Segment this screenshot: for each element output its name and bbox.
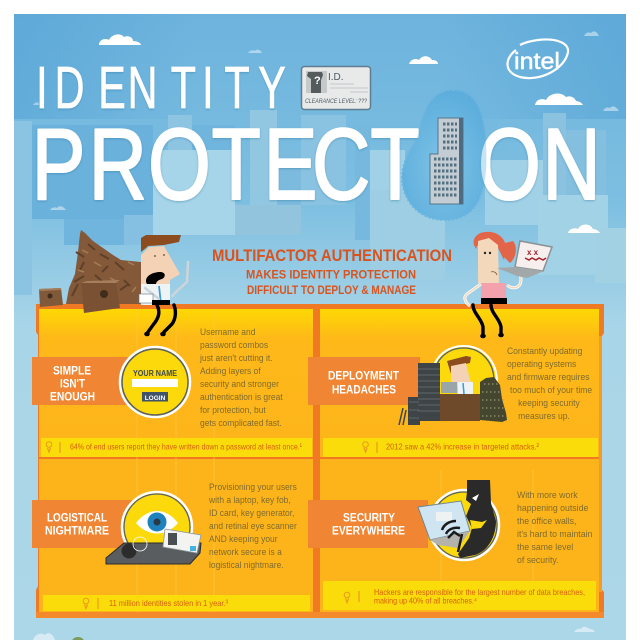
icon: login form: YOUR NAME — [133, 369, 178, 378]
body text: measures up. — [518, 411, 570, 421]
intel logo — [507, 40, 568, 78]
body text: just aren't cutting it. — [199, 353, 273, 363]
title: protection: ON — [478, 108, 601, 221]
icon: office building — [430, 118, 463, 204]
stat bar: 64% of end users report they have written down a password at least once.¹ — [70, 442, 302, 452]
body text: Provisioning your users — [209, 482, 297, 492]
icon: login form — [120, 347, 190, 417]
man character — [139, 235, 188, 336]
section: simple isn't enough — [32, 327, 312, 457]
body text: for protection, but — [200, 405, 266, 415]
shield bubble — [402, 90, 486, 220]
body text: operating systems — [507, 359, 577, 369]
tab: ISN'T — [60, 378, 85, 390]
body text: happening outside — [517, 503, 588, 513]
ID card icon: I.D. — [328, 72, 344, 83]
body text: logistical nightmare. — [209, 560, 284, 570]
body text: AND keeping your — [209, 534, 278, 544]
body text: with a laptop, key fob, — [208, 495, 291, 505]
section: security everywhere — [308, 480, 596, 610]
body text: Username and — [200, 327, 255, 337]
heading: multifactor authentication: DIFFICULT TO DEPLOY & MANAGE — [247, 283, 416, 297]
tab: NIGHTMARE — [45, 526, 109, 538]
body text: authentication is great — [200, 392, 283, 402]
body text: the same level — [517, 542, 573, 552]
icon: man behind desk — [399, 346, 507, 425]
tab: LOGISTICAL — [47, 512, 107, 524]
ID card icon — [302, 66, 370, 110]
stat bar — [323, 438, 598, 457]
section: deployment headaches — [308, 346, 598, 457]
pile of boxes — [39, 230, 141, 313]
stat bar: 2012 saw a 42% increase in targeted attacks.² — [386, 442, 539, 452]
tab — [32, 500, 132, 548]
stat bar: making up 40% of all breaches.⁴ — [374, 596, 477, 606]
body text: too much of your time — [510, 385, 592, 395]
bottom globe icon — [71, 637, 85, 640]
heading: multifactor authentication — [212, 246, 452, 297]
tab — [32, 357, 132, 405]
main panel — [36, 304, 604, 618]
stat bar — [323, 581, 596, 610]
body text: and firmware requires — [507, 372, 590, 382]
body text: network secure is a — [209, 547, 282, 557]
woman character: x x — [527, 248, 539, 257]
heading: multifactor authentication: MAKES IDENTITY PROTECTION — [246, 268, 416, 282]
title: protection: PROTECT — [32, 108, 420, 221]
body text: gets complicated fast. — [200, 418, 282, 428]
bubble overlay on letters — [402, 90, 486, 220]
body text: of security. — [517, 555, 559, 565]
intel logo: intel — [514, 48, 560, 74]
body text: it's hard to maintain — [517, 529, 592, 539]
tab: ENOUGH — [50, 392, 95, 404]
ID card icon: ? — [314, 75, 321, 87]
tab — [308, 357, 420, 405]
ID card icon: CLEARANCE LEVEL: ??? — [305, 98, 367, 105]
tab: EVERYWHERE — [332, 526, 405, 538]
tab: SECURITY — [343, 512, 395, 524]
title: identity: IDENTITY — [36, 55, 286, 121]
heading: multifactor authentication: MULTIFACTOR AUTHENTICATION — [212, 246, 452, 265]
icon: retinal scanner and key fob — [106, 492, 201, 564]
body text: security and stronger — [200, 379, 279, 389]
section: logistical nightmare — [32, 482, 310, 611]
tab: HEADACHES — [332, 384, 396, 396]
icon: hacker shadow over laptop — [418, 480, 499, 560]
body text: Constantly updating — [507, 346, 582, 356]
tab: SIMPLE — [53, 366, 91, 378]
body text: Adding layers of — [200, 366, 261, 376]
stat bar — [41, 438, 312, 457]
title: protection — [32, 108, 601, 221]
stat bar: Hackers are responsible for the largest number of data breaches, — [374, 587, 585, 597]
body text: the office walls, — [517, 516, 576, 526]
body text: password combos — [200, 340, 269, 350]
icon: login form: LOGIN — [145, 395, 166, 402]
body text: keeping security — [518, 398, 580, 408]
stat bar — [43, 595, 310, 611]
woman character — [465, 232, 552, 338]
tab — [308, 500, 428, 548]
stat bar: 11 million identities stolen in 1 year.³ — [109, 598, 228, 608]
tab: DEPLOYMENT — [328, 370, 399, 382]
city skyline — [14, 110, 626, 295]
body text: ID card, key generator, — [209, 508, 294, 518]
body text: and retinal eye scanner — [209, 521, 297, 531]
body text: With more work — [517, 490, 578, 500]
